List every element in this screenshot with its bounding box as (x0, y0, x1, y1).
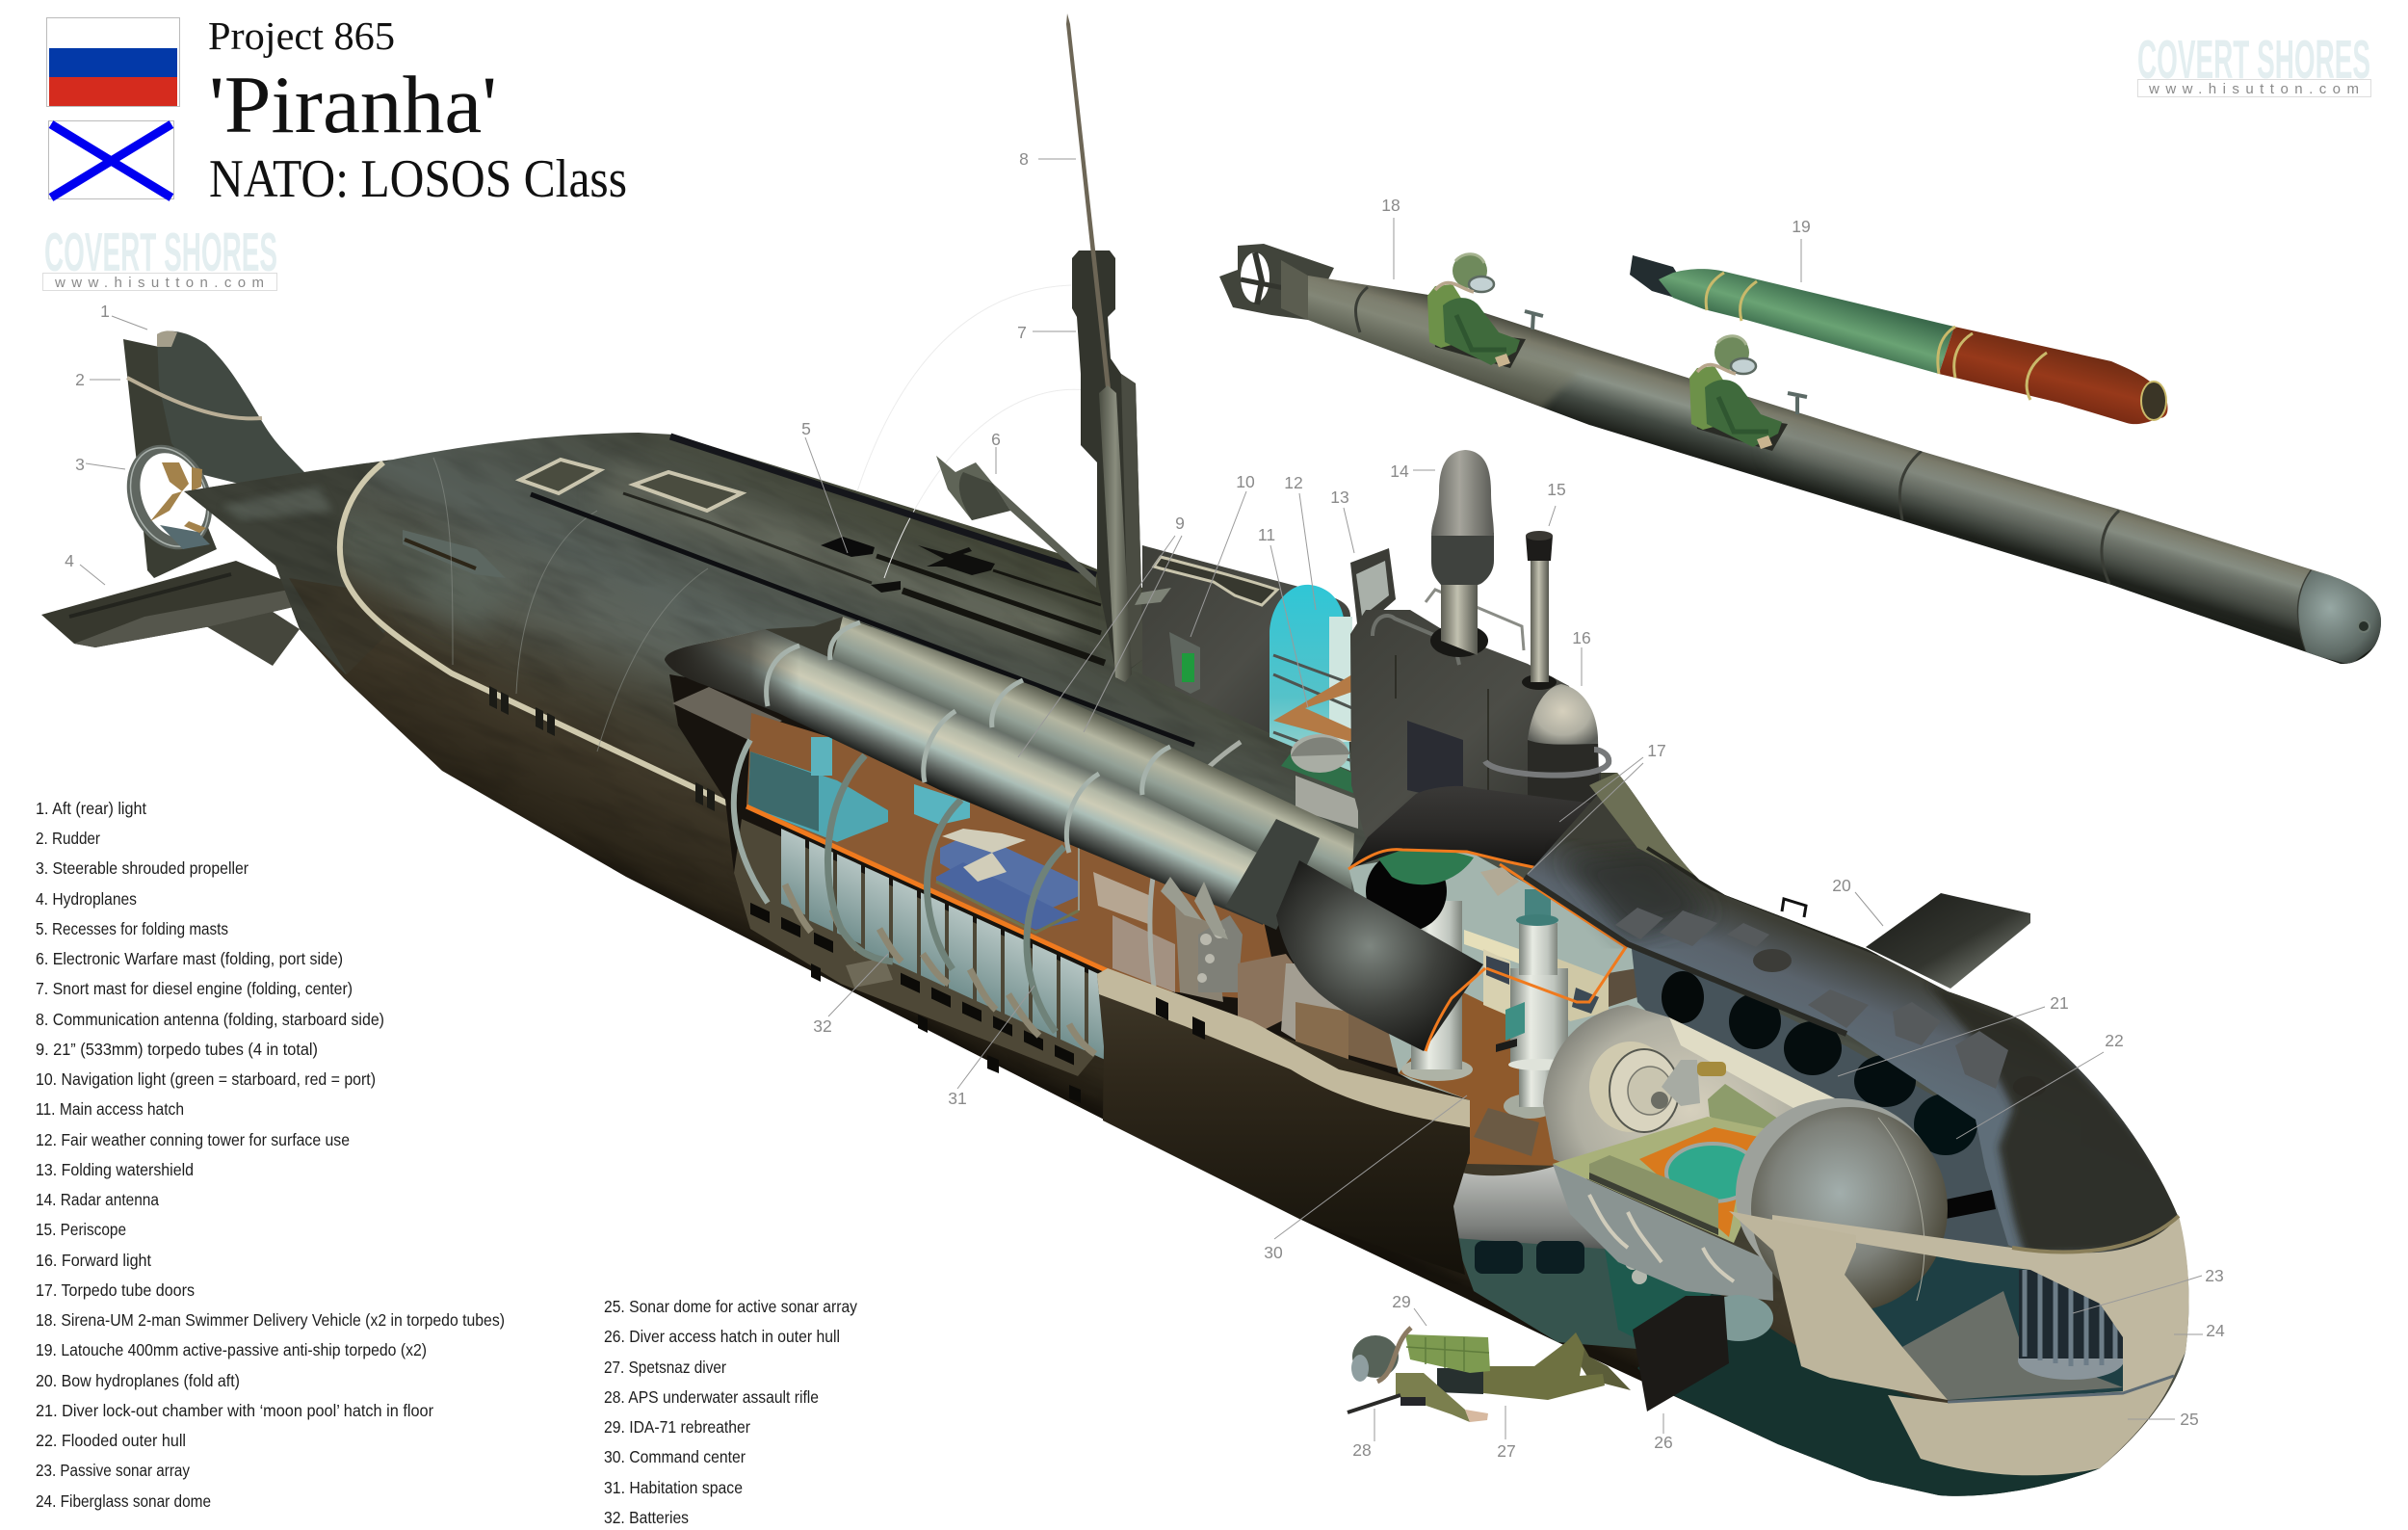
green dome inside opening (1377, 849, 1474, 884)
watermark left (42, 222, 277, 291)
parts legend column 1: 22. Flooded outer hull (36, 1431, 186, 1450)
callout numbers and leaders: 7 (1017, 323, 1027, 342)
periscope (1522, 531, 1557, 690)
casing panels (1615, 908, 2008, 1089)
orange hull-cut line (1486, 864, 1626, 1002)
callout numbers and leaders: 27 (1497, 1441, 1516, 1461)
callout numbers and leaders: 12 (1284, 473, 1303, 492)
conning tower cut-away (1269, 585, 1358, 829)
lower door (1276, 860, 1483, 1051)
parts legend column 1: 4. Hydroplanes (36, 889, 137, 909)
tower deck (1273, 674, 1352, 742)
parts legend column 1: 13. Folding watershield (36, 1160, 194, 1179)
parts legend column 1: 3. Steerable shrouded propeller (36, 858, 249, 878)
far tube (828, 617, 1354, 910)
floor equipment box (1589, 1155, 1718, 1228)
aft frame beam (672, 687, 782, 740)
forward sphere bulkhead (1736, 1098, 1948, 1311)
tube opening (1366, 851, 1447, 932)
torpedo tube doors (1276, 786, 1639, 1051)
moon pool (1666, 1144, 1759, 1201)
parts legend column 2: 27. Spetsnaz diver (604, 1358, 726, 1377)
batteries (781, 829, 1106, 1060)
parts legend column 1: 15. Periscope (36, 1220, 126, 1239)
fairing behind far tube (765, 617, 872, 665)
diver lock-out chamber (1543, 1005, 1837, 1341)
warhead section (1939, 327, 2168, 424)
flooded outer hull (1632, 948, 2008, 1247)
upper door (1348, 786, 1639, 872)
parts legend column 1: 7. Snort mast for diesel engine (folding, center) (36, 979, 353, 998)
main column (1496, 889, 1570, 1119)
dark teal bottom (1637, 1291, 2100, 1496)
periscope well cylinder (1401, 901, 1473, 1081)
vents on the boot-top (489, 686, 715, 811)
hand (1465, 1410, 1488, 1422)
callout numbers and leaders: 23 (2205, 1266, 2224, 1285)
propeller shroud (1219, 244, 1334, 320)
bilge structure (734, 819, 1103, 1076)
callout numbers and leaders: 31 (948, 1089, 967, 1108)
forward rider (1689, 335, 1788, 451)
arm (1396, 1373, 1470, 1422)
hull floor squares (811, 963, 1081, 1103)
cutaway opening: habitation space and batteries (669, 674, 1470, 1103)
fiberglass sonar dome (1729, 1211, 2189, 1475)
parts legend column 2: 30. Command center (604, 1447, 746, 1466)
near tube (665, 629, 1276, 925)
parts legend column 1: 10. Navigation light (green = starboard, red = port) (36, 1069, 376, 1089)
watermark right: www.hisutton.com (2148, 81, 2359, 97)
helmet (1352, 1335, 1399, 1378)
hatch handle on casing (1782, 899, 1806, 917)
callout numbers and leaders: 17 (1647, 741, 1666, 760)
console strip (1464, 930, 1519, 963)
parts legend column 1 (36, 799, 505, 1511)
torpedo (1630, 255, 2168, 424)
propeller blades (150, 462, 206, 533)
main pressure hull (184, 433, 2188, 1496)
callout numbers and leaders: 11 (1258, 525, 1275, 544)
navigation light (1169, 632, 1200, 694)
rifle (1348, 1395, 1400, 1412)
parts legend column 1: 12. Fair weather conning tower for surface use (36, 1130, 350, 1149)
callout numbers and leaders: 26 (1654, 1433, 1673, 1452)
equipment boxes (1093, 872, 1416, 1073)
dome left flank (1729, 1211, 1948, 1400)
radar antenna (1430, 450, 1494, 657)
parts legend column 1: 1. Aft (rear) light (36, 799, 146, 818)
fins (1570, 1332, 1631, 1390)
Spetsnaz diver (1348, 1328, 1631, 1422)
callout numbers and leaders: 16 (1572, 628, 1591, 647)
cream boot-top line (340, 462, 732, 805)
green section (1659, 269, 1954, 374)
upper rail (670, 436, 1096, 575)
chamber body (1543, 1005, 1837, 1237)
parts legend column 1: 8. Communication antenna (folding, starboard side) (36, 1010, 384, 1029)
tube bands (767, 622, 1170, 853)
callout numbers and leaders: 25 (2180, 1410, 2199, 1429)
tail fins (1630, 255, 1681, 298)
parts legend column 2: 26. Diver access hatch in outer hull (604, 1327, 840, 1346)
paint mottling (367, 433, 1350, 787)
command center (1348, 848, 1671, 1166)
mast recesses (821, 537, 875, 557)
nose cap (2298, 570, 2389, 665)
flag: St Andrew naval ensign (48, 121, 173, 198)
parts legend column 1: 21. Diver lock-out chamber with ‘moon pool’ hatch in floor (36, 1401, 433, 1420)
bunks (936, 829, 1079, 933)
callout numbers and leaders: 29 (1392, 1292, 1411, 1311)
callout numbers and leaders: 6 (991, 430, 1001, 449)
callout numbers and leaders: 28 (1352, 1440, 1372, 1460)
callout numbers and leaders: 15 (1547, 480, 1566, 499)
folding watershield (1350, 548, 1396, 632)
title block: 'Piranha' (209, 60, 497, 150)
watermark left: www.hisutton.com (54, 275, 264, 291)
parts legend column 2: 31. Habitation space (604, 1478, 743, 1497)
habitation floor (746, 713, 1281, 1002)
callout numbers and leaders: 5 (801, 419, 811, 438)
title block: Project 865 (208, 13, 395, 58)
title block (208, 13, 627, 209)
callout numbers and leaders: 24 (2206, 1321, 2225, 1340)
hull frames (734, 740, 1241, 1032)
parts legend column 1: 5. Recesses for folding masts (36, 919, 228, 938)
forward lower hull with windows (1453, 1161, 2100, 1496)
sail window (1407, 721, 1463, 803)
opening base (669, 674, 1470, 1100)
callout numbers and leaders: 20 (1832, 876, 1851, 895)
parts legend column 1: 19. Latouche 400mm active-passive anti-ship torpedo (x2) (36, 1340, 427, 1359)
parts legend column 1: 17. Torpedo tube doors (36, 1280, 195, 1300)
callout numbers and leaders: 18 (1381, 196, 1400, 215)
habitation wall panels (748, 752, 888, 842)
torpedo tubes (665, 617, 1354, 939)
dome shell upper band (1772, 1215, 2189, 1395)
parts legend column 1: 6. Electronic Warfare mast (folding, port side) (36, 949, 343, 968)
command floor (1399, 992, 1580, 1166)
callout numbers and leaders: 10 (1236, 472, 1255, 491)
parts legend column 2 (604, 1297, 857, 1527)
shrouded propeller ring (112, 432, 227, 563)
flag: Russian tricolour (46, 17, 179, 106)
compartment backdrop (1348, 848, 1671, 1166)
sonar platform (1902, 1291, 2123, 1400)
dark hatch on floor (1474, 1108, 1539, 1156)
parts legend column 1: 20. Bow hydroplanes (fold aft) (36, 1371, 240, 1390)
title block: NATO: LOSOS Class (209, 149, 627, 209)
hydroplane (41, 561, 301, 647)
lower fin (206, 597, 300, 666)
hull tube (1308, 276, 2381, 664)
text: COVERT SHORES (44, 222, 277, 283)
faint mast folding arcs (857, 285, 1088, 578)
casing rails (1525, 877, 1846, 1034)
diver access hatch (1633, 1296, 1729, 1411)
forward light dome (1485, 684, 1609, 814)
tube rear cap shading (665, 629, 799, 725)
breathing hose (1377, 1328, 1411, 1382)
swimmer delivery vehicle (1219, 244, 2389, 665)
callout numbers and leaders: 13 (1330, 488, 1349, 507)
callout numbers and leaders: 32 (813, 1016, 832, 1036)
aft sail and navigation light (1135, 545, 1350, 771)
bilge cells (750, 903, 1074, 1066)
callout numbers and leaders: 9 (1175, 514, 1185, 533)
callout numbers and leaders: 21 (2050, 993, 2069, 1013)
callout numbers and leaders: 30 (1264, 1243, 1283, 1262)
parts legend column 2: 32. Batteries (604, 1508, 689, 1527)
lower rail (531, 494, 1194, 745)
callout numbers and leaders: 19 (1792, 217, 1811, 236)
main access hatch (1281, 734, 1358, 829)
parts legend column 2: 29. IDA-71 rebreather (604, 1417, 750, 1437)
grooves (623, 493, 872, 583)
legs (1483, 1332, 1605, 1400)
callout numbers and leaders: 4 (65, 551, 74, 570)
passive sonar array (2018, 1270, 2124, 1380)
rudder rear section (123, 339, 217, 578)
rear rider (1427, 253, 1526, 368)
communication antenna (1066, 13, 1132, 682)
control sticks (1525, 311, 1807, 414)
parts legend column 1: 11. Main access hatch (36, 1099, 184, 1119)
nose recess (2141, 382, 2166, 420)
callout numbers and leaders (65, 149, 2225, 1461)
chamber fittings (1662, 1060, 1700, 1106)
chamber lower shell (1553, 1164, 1773, 1301)
bilge rib hooks (785, 884, 1095, 1054)
parts legend column 2: 28. APS underwater assault rifle (604, 1387, 819, 1407)
callout numbers and leaders: 22 (2105, 1031, 2124, 1050)
lower hull fold with cream deck edge (1097, 968, 1470, 1275)
forward sail block (1350, 590, 1601, 848)
callout numbers and leaders: 14 (1390, 462, 1409, 481)
bench (1708, 1084, 1781, 1143)
hull shading and deck details (184, 433, 1350, 811)
parts legend column 1: 18. Sirena-UM 2-man Swimmer Delivery Vehicle (x2 in torpedo tubes) (36, 1310, 505, 1330)
dark tail section (184, 460, 393, 674)
tube shutter band (1225, 819, 1320, 930)
parts legend column 1: 16. Forward light (36, 1251, 151, 1270)
bow hydroplane (1866, 893, 2030, 989)
right console (1557, 959, 1609, 1021)
rebreather (1405, 1334, 1490, 1373)
callout numbers and leaders: 2 (75, 370, 85, 389)
parts legend column 1: 2. Rudder (36, 829, 100, 848)
snort mast side panel (1121, 374, 1143, 670)
bow casing (1525, 773, 2186, 1255)
parts legend column 1: 9. 21” (533mm) torpedo tubes (4 in total) (36, 1040, 318, 1059)
sea-valve wheel under chamber (1704, 1295, 1773, 1341)
snort mast (1072, 251, 1143, 679)
upper fin (157, 331, 304, 491)
deck hatch outlines (520, 460, 600, 493)
parts legend column 1: 14. Radar antenna (36, 1190, 159, 1209)
camera box (1480, 867, 1519, 896)
submarine tail group: rudder, shrouded propeller, hydroplane (41, 330, 304, 666)
torpedo bands (1706, 273, 2047, 400)
chamber floor (1553, 1117, 1782, 1243)
torso (1437, 1368, 1483, 1394)
sonar chamber interior (1830, 1243, 2124, 1400)
orange floor edge (746, 806, 1148, 989)
callout numbers and leaders: 3 (75, 455, 85, 474)
parts legend column 1: 23. Passive sonar array (36, 1461, 190, 1480)
monitor (1486, 956, 1509, 985)
callout numbers and leaders: 1 (100, 302, 110, 321)
electronic warfare mast (936, 456, 1096, 588)
callout numbers and leaders: 8 (1019, 149, 1029, 169)
dome lower (1888, 1376, 2174, 1475)
chamber hatch rings (1589, 1042, 1679, 1132)
parts legend column 2: 25. Sonar dome for active sonar array (604, 1297, 857, 1316)
parts legend column 1: 24. Fiberglass sonar dome (36, 1491, 211, 1511)
bilge plate (846, 958, 893, 988)
